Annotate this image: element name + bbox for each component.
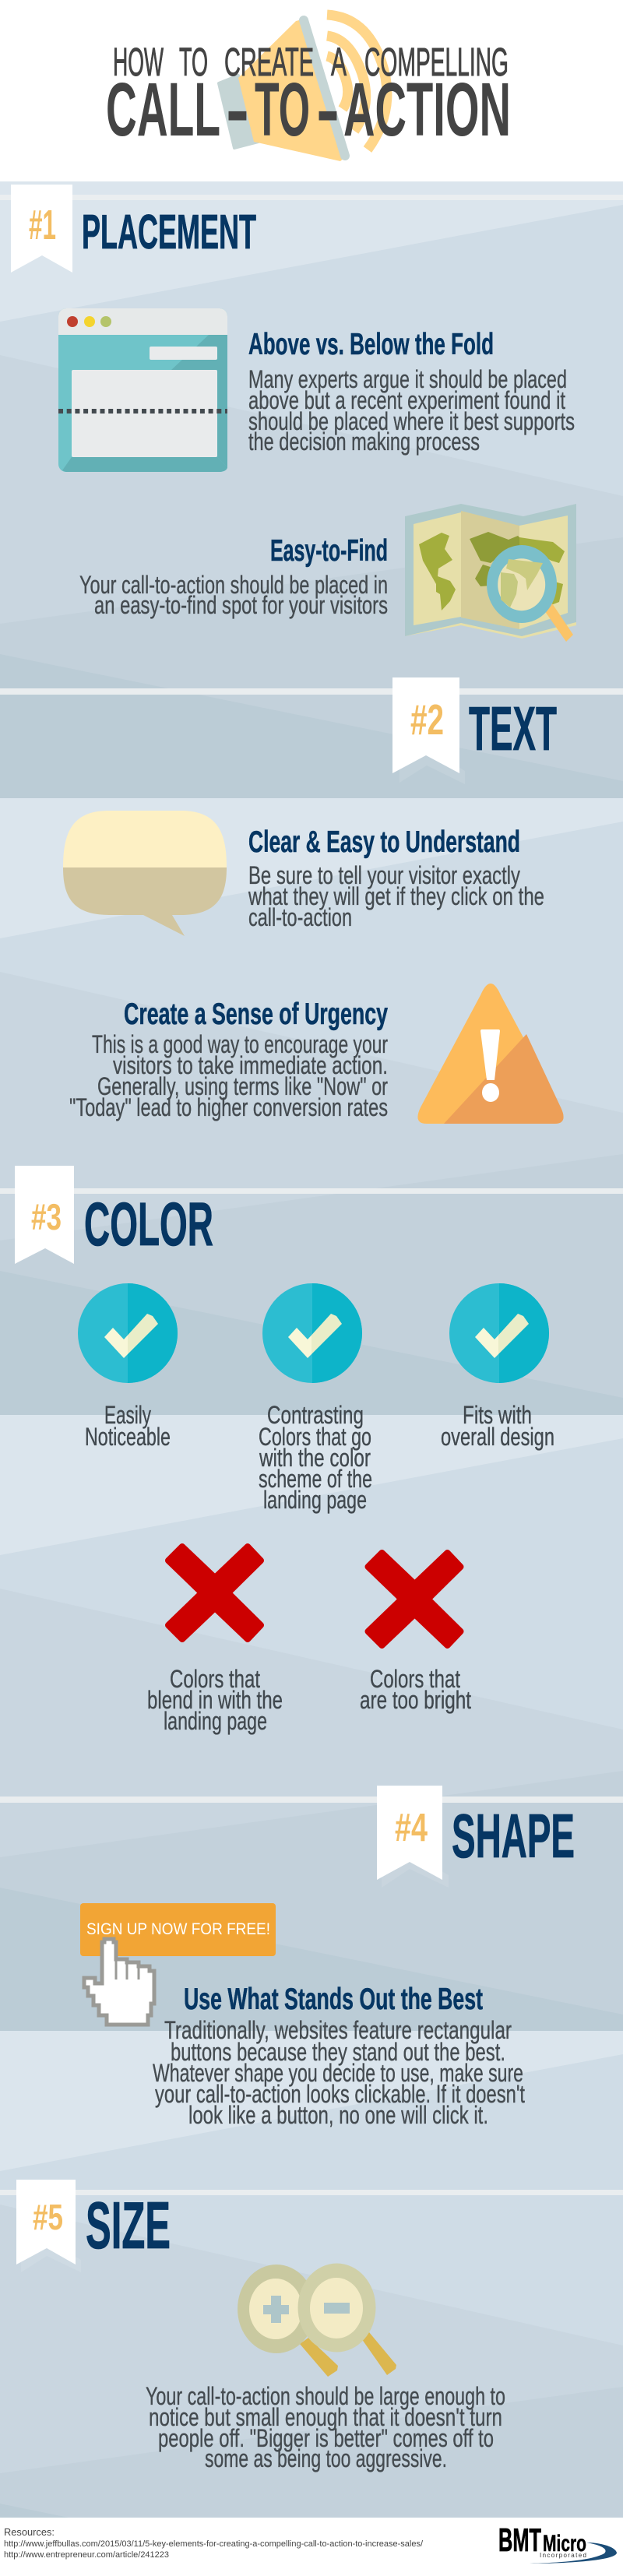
text: clear and easy to understand: Be sure to tell your visitor exactly	[248, 861, 520, 889]
caption: colors that blend in: Colors that	[170, 1665, 260, 1693]
caption: contrasting colors: scheme of the	[259, 1465, 372, 1493]
icon: check 2	[262, 1283, 362, 1383]
title	[106, 40, 511, 152]
icon: pixel hand cursor	[84, 1939, 154, 2025]
icon: warning triangle	[417, 984, 564, 1124]
button: sign up: SIGN UP NOW FOR FREE!	[86, 1920, 270, 1938]
caption: colors that blend in: landing page	[164, 1707, 267, 1735]
text: use what stands out the best: Use What Stands Out the Best	[184, 1983, 483, 2016]
text: create a sense of urgency: This is a good way to encourage your	[92, 1030, 388, 1058]
caption: easily noticeable: Noticeable	[85, 1423, 171, 1451]
icon: map with magnifier	[405, 504, 576, 642]
caption: easily noticeable: Easily	[104, 1401, 151, 1429]
ribbon: #3: #3	[31, 1196, 62, 1237]
text: use what stands out the best: look like a button, no one will click it.	[188, 2101, 488, 2129]
text: size body: people off. "Bigger is better" comes off to	[158, 2424, 494, 2452]
logo: BMT Micro: BMT	[498, 2521, 541, 2558]
ribbon: #2: #2	[410, 695, 444, 744]
text: create a sense of urgency: Generally, using terms like "Now" or	[97, 1072, 388, 1100]
text: clear and easy to understand: call-to-action	[248, 903, 352, 931]
text: above vs below the fold: Above vs. Below the Fold	[248, 328, 494, 361]
caption: colors too bright	[360, 1665, 471, 1714]
caption: contrasting colors: with the color	[259, 1444, 371, 1472]
caption: fits with overall design: Fits with	[463, 1401, 532, 1429]
icon: red x 2	[368, 1553, 461, 1645]
footer: resources	[4, 2526, 424, 2560]
icon: magnifiers plus and minus	[238, 2263, 396, 2377]
text: above vs below the fold: the decision making process	[248, 428, 480, 456]
text: use what stands out the best: Traditionally, websites feature rectangular	[164, 2016, 512, 2044]
text: easy to find: Easy-to-Find	[270, 534, 388, 568]
ribbon: #3	[15, 1166, 74, 1264]
ribbon: #4	[377, 1786, 449, 1888]
footer: resources: Resources:	[4, 2526, 55, 2538]
text: create a sense of urgency: Create a Sense of Urgency	[124, 998, 388, 1031]
title: HOW	[113, 40, 164, 84]
heading: size: SIZE	[86, 2189, 171, 2263]
heading: placement: PLACEMENT	[82, 206, 256, 259]
icon: speech bubble	[63, 811, 227, 936]
text: easy to find	[79, 534, 388, 619]
ribbon: #1	[11, 185, 72, 273]
ribbon: #5	[16, 2180, 81, 2272]
text: size body: some as being too aggressive.	[205, 2444, 447, 2472]
title: A	[331, 40, 347, 84]
icon: check 3	[449, 1283, 549, 1383]
title: COMPELLING	[364, 40, 509, 84]
heading: color: COLOR	[84, 1189, 213, 1258]
ribbon: #2	[392, 677, 465, 784]
logo: BMT Micro	[498, 2521, 617, 2564]
caption: colors too bright: Colors that	[370, 1665, 460, 1693]
caption: colors too bright: are too bright	[360, 1686, 471, 1714]
caption: easily noticeable	[85, 1401, 171, 1451]
title: TO	[179, 40, 208, 84]
title: TO	[255, 67, 310, 152]
caption: fits with overall design: overall design	[441, 1423, 554, 1451]
title: CREATE	[224, 40, 314, 84]
caption: contrasting colors: Colors that go	[259, 1423, 371, 1451]
text: create a sense of urgency	[69, 998, 388, 1121]
icon: megaphone	[219, 15, 387, 161]
caption: colors that blend in: blend in with the	[147, 1686, 283, 1714]
icon: browser window	[58, 308, 227, 472]
text: easy to find: an easy-to-find spot for your visitors	[94, 591, 388, 619]
text: size body: notice but small enough that it doesn't turn	[149, 2403, 502, 2431]
footer: resources: http://www.entrepreneur.com/article/241223	[4, 2550, 169, 2560]
footer: resources: http://www.jeffbullas.com/2015/03/11/5-key-elements-for-creating-a-compelling-call-to-action-to-increase-sales/	[4, 2539, 424, 2549]
title: CALL	[106, 67, 220, 152]
title: -	[226, 67, 249, 152]
logo: BMT Micro: Incorporated	[540, 2552, 586, 2559]
button: sign up	[80, 1903, 276, 1956]
text: use what stands out the best	[153, 1983, 525, 2129]
text: easy to find: Your call-to-action should be placed in	[79, 571, 388, 599]
ribbon: #4: #4	[395, 1805, 428, 1849]
logo: BMT Micro: Micro	[543, 2531, 586, 2557]
text: size body	[146, 2382, 505, 2472]
text: clear and easy to understand	[248, 825, 544, 931]
text: create a sense of urgency: visitors to take immediate action.	[113, 1051, 388, 1079]
caption: contrasting colors: Contrasting	[267, 1401, 364, 1429]
text: create a sense of urgency: "Today" lead to higher conversion rates	[69, 1093, 388, 1121]
text: above vs below the fold	[248, 328, 575, 456]
text: use what stands out the best: buttons because they stand out the best.	[171, 2038, 505, 2066]
title: -	[316, 67, 340, 152]
caption: colors that blend in	[147, 1665, 283, 1735]
caption: contrasting colors	[259, 1401, 372, 1514]
ribbon: #5: #5	[33, 2197, 63, 2237]
icon: check 1	[78, 1283, 178, 1383]
icon: red x 1	[168, 1547, 261, 1639]
caption: contrasting colors: landing page	[263, 1486, 367, 1514]
ribbon: #1: #1	[29, 202, 56, 248]
caption: fits with overall design	[441, 1401, 554, 1451]
